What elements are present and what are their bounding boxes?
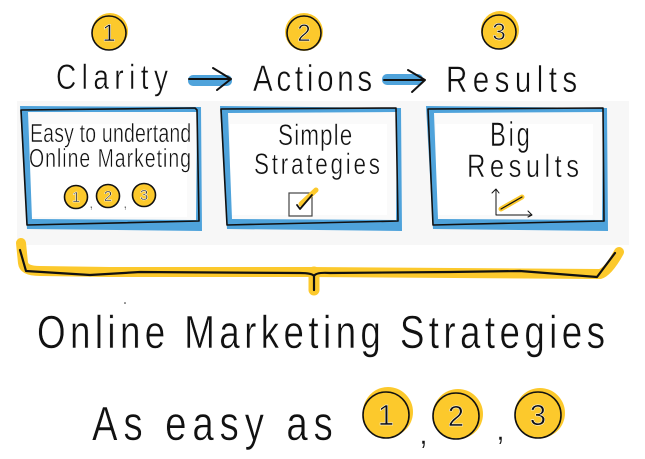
panel: clarity card <box>20 106 202 231</box>
step 2 badge: 2 <box>297 20 311 47</box>
panel background <box>17 101 629 245</box>
arrow: actions to results <box>382 70 425 92</box>
card title: Easy to undertand <box>30 118 191 148</box>
small badges 1, 2, 3: , <box>89 195 93 212</box>
card subtitle: Results <box>467 149 579 185</box>
large badges 1, 2, 3: , <box>419 415 428 451</box>
small badges 1, 2, 3: , <box>123 195 127 212</box>
title: Online Marketing Strategies: Online Marketing Strategies <box>37 306 605 358</box>
step 1 badge <box>92 13 128 50</box>
large badges 1, 2, 3: , <box>496 411 505 447</box>
bracket <box>20 243 619 290</box>
panel: results card <box>426 106 608 231</box>
large badges 1, 2, 3 <box>363 387 565 451</box>
icon: checkbox <box>289 190 316 216</box>
large badges 1, 2, 3: 1 <box>378 400 394 432</box>
arrow: clarity to actions <box>188 68 232 90</box>
card title: Big <box>490 116 530 154</box>
icon: growth chart <box>492 189 532 217</box>
step 2 badge <box>285 13 323 51</box>
large badges 1, 2, 3: 2 <box>448 401 464 433</box>
small badges 1, 2, 3: 2 <box>104 188 112 205</box>
panel: actions card <box>220 106 402 231</box>
small badges 1, 2, 3: 3 <box>140 187 148 204</box>
stray pen dot <box>124 302 126 304</box>
step 1 badge: 1 <box>102 20 116 47</box>
card subtitle: Online Marketing <box>29 143 191 173</box>
card title: Simple <box>278 118 352 152</box>
card subtitle: Strategies <box>254 147 380 181</box>
small badges 1, 2, 3 <box>64 184 156 212</box>
large badges 1, 2, 3: 3 <box>530 400 546 432</box>
tagline: As easy as: As easy as <box>92 398 333 451</box>
step 3 badge <box>481 11 519 49</box>
heading: Actions: Actions <box>253 59 372 100</box>
heading: Clarity: Clarity <box>56 57 168 97</box>
heading: Results: Results <box>446 60 577 101</box>
small badges 1, 2, 3: 1 <box>72 189 80 206</box>
step 3 badge: 3 <box>492 19 506 46</box>
